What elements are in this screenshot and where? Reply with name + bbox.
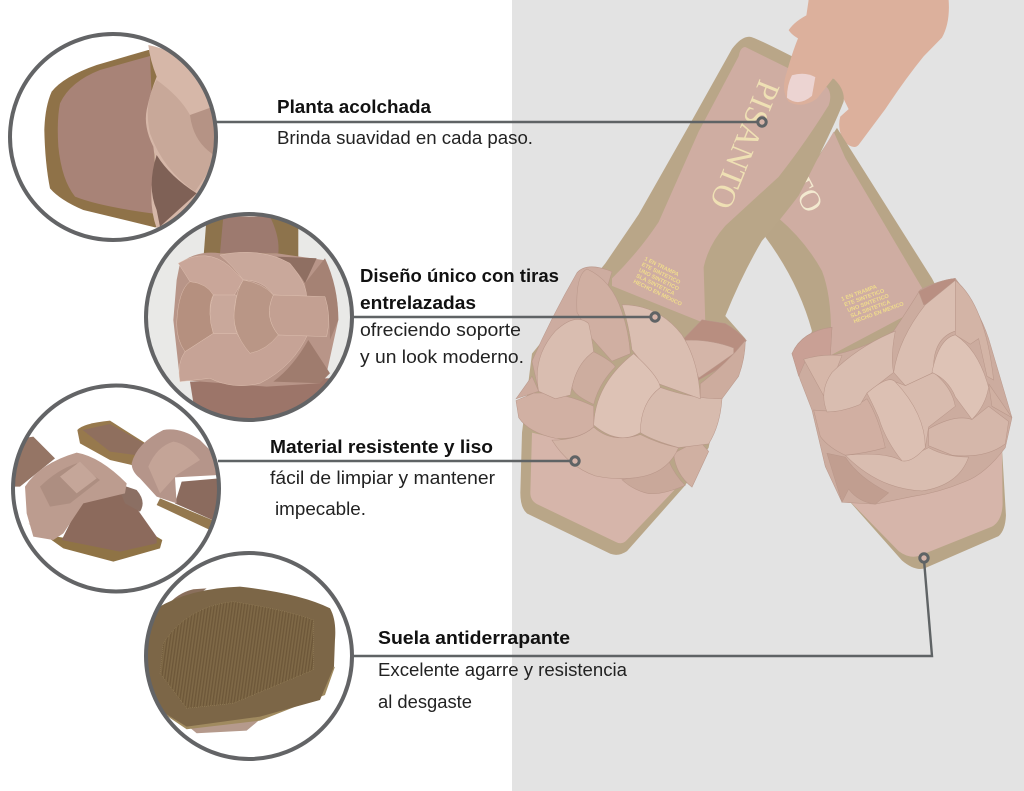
text block: suela antiderrapante [378, 628, 628, 712]
text block: material resistente: impecable. [275, 499, 366, 519]
gold size label on left insole: HECHO EN MEXICO [632, 279, 683, 308]
detail circle: woven straps [144, 212, 354, 423]
detail circle: padded insole [8, 32, 220, 242]
text block: diseno unico: Diseño único con tiras [360, 266, 559, 286]
right sandal insole [779, 132, 925, 356]
right sandal size label: 1 EN TRAMPA [841, 284, 878, 303]
left sandal sole [520, 37, 844, 555]
callout line: diseno unico [352, 313, 659, 321]
right sandal size label: SLA SINTETICA [850, 300, 891, 320]
gold size label on left insole [632, 256, 694, 308]
callout line: suela antiderrapante [350, 554, 932, 656]
text block: suela antiderrapante: al desgaste [378, 692, 472, 712]
gold size label on left insole: SLA SINTETICA [635, 273, 675, 297]
right sandal size label: ETE SINTETICO [844, 288, 886, 308]
text block: diseno unico: ofreciendo soporte [360, 320, 521, 340]
thumb [784, 0, 879, 105]
right sandal sole [765, 128, 1006, 569]
gold size label on left insole: ETE SINTETICO [640, 262, 682, 286]
left sandal woven strap [516, 269, 722, 494]
right sandal toe insole [845, 448, 1003, 557]
text block: planta acolchada: Brinda suavidad en cada paso. [277, 128, 533, 148]
left sandal insole [612, 47, 830, 324]
gold size label on left insole: UNO SINTETICO [638, 268, 680, 293]
text block: diseno unico: entrelazadas [360, 293, 476, 313]
right sandal size label: UNO SINTETICO [847, 293, 891, 314]
right sandal woven strap [792, 278, 1012, 504]
gold size label on left insole: 1 EN TRAMPA [643, 256, 679, 278]
text block: planta acolchada: Planta acolchada [277, 97, 432, 117]
callout line: material resistente [218, 457, 579, 465]
text block: suela antiderrapante: Excelente agarre y resistencia [378, 660, 628, 680]
detail circle: pair of sandals [11, 384, 221, 594]
left sandal lining and vamp [516, 267, 746, 399]
photo: sandals held by hand [516, 0, 1012, 569]
text block: planta acolchada [277, 97, 533, 148]
text block: material resistente [270, 437, 495, 519]
text block: diseno unico: y un look moderno. [360, 347, 524, 367]
right sandal brand text: TO [782, 168, 829, 218]
text block: diseno unico [360, 266, 559, 367]
left sandal toe insole [530, 433, 675, 543]
text block: material resistente: Material resistente y liso [270, 437, 493, 457]
callout line: planta acolchada [215, 118, 766, 126]
right sandal size label [841, 277, 905, 327]
hand [789, 0, 949, 147]
brand text on left insole: PISANTO [702, 75, 786, 214]
right sandal size label: HECHO EN MEXICO [853, 301, 905, 325]
detail circle: non-slip sole [143, 551, 354, 761]
text block: material resistente: fácil de limpiar y mantener [270, 468, 495, 488]
background panel [512, 0, 1024, 791]
text block: suela antiderrapante: Suela antiderrapante [378, 628, 570, 648]
